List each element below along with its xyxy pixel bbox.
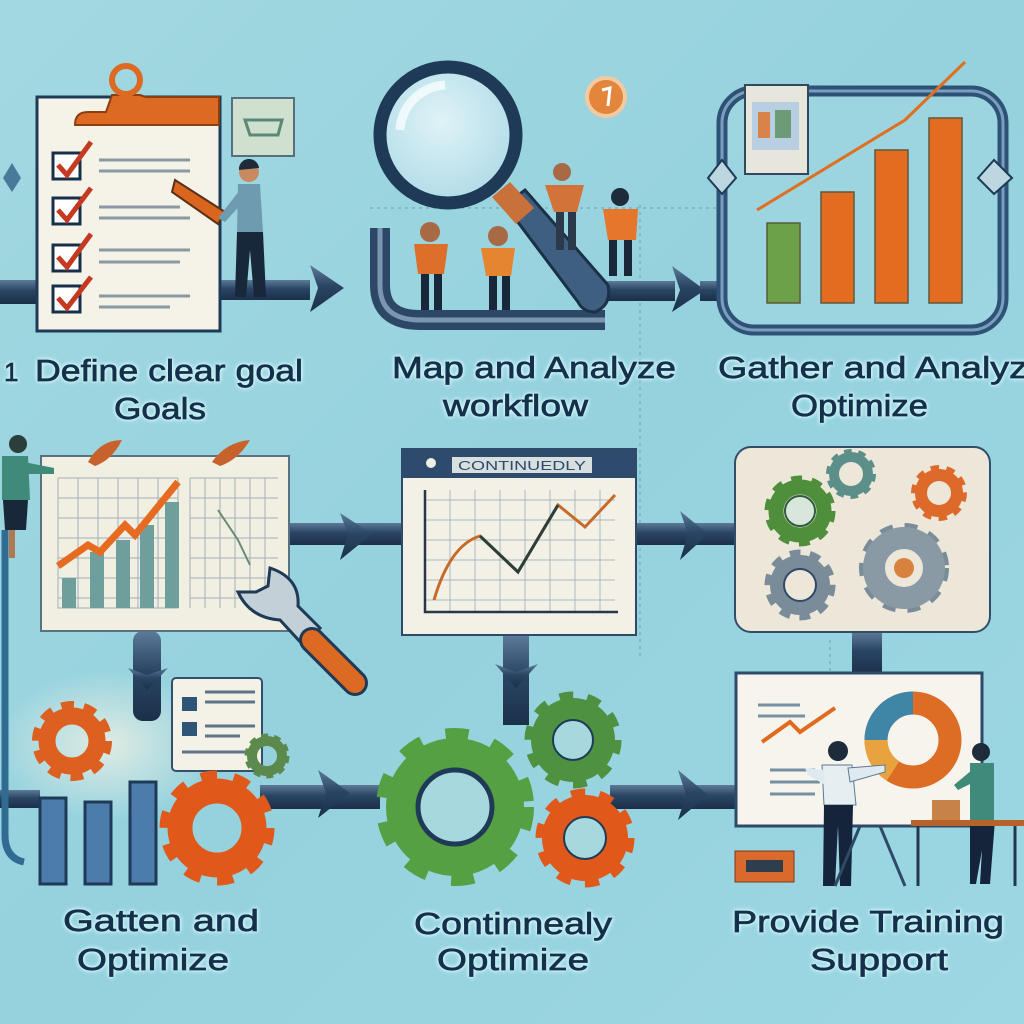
map line xyxy=(218,510,250,565)
heading: step 4 xyxy=(63,903,259,977)
dotted guide lines xyxy=(370,205,830,680)
heading: step 4: Optimize xyxy=(77,942,229,977)
gears xyxy=(770,453,963,615)
panel: central gears xyxy=(385,698,628,881)
grid xyxy=(425,490,615,612)
diamond marker xyxy=(3,163,21,192)
heading: step 2: Map and Analyze xyxy=(392,350,676,385)
clipboard xyxy=(37,66,220,331)
heading: step 5: Continnealy xyxy=(414,906,613,941)
orange gear large xyxy=(167,778,267,878)
panel: gears and documents xyxy=(38,678,286,884)
green gear small xyxy=(248,737,286,775)
title bar xyxy=(402,449,636,478)
connector pipes xyxy=(0,265,882,862)
lines xyxy=(434,495,615,600)
people xyxy=(414,163,638,310)
board xyxy=(735,447,990,632)
sign xyxy=(735,851,794,882)
heading: step 1: 1 xyxy=(4,357,18,387)
heading: step 4: Gatten and xyxy=(63,903,259,938)
heading: step 5 xyxy=(414,906,613,977)
document xyxy=(172,678,262,771)
orange gear small xyxy=(38,707,106,775)
person xyxy=(2,435,54,558)
markers xyxy=(88,440,122,466)
panel: training presentation xyxy=(735,673,1024,886)
heading: step 6: Provide Training xyxy=(732,904,1004,939)
heading: step 6: Support xyxy=(810,942,948,977)
title bar: CONTINUEDLY xyxy=(458,458,586,473)
grid xyxy=(58,478,278,608)
heading: step 3 xyxy=(718,350,1024,423)
window xyxy=(402,449,636,635)
orange badge xyxy=(587,78,625,116)
green gear large xyxy=(385,737,525,877)
table xyxy=(911,800,1024,886)
orange trend xyxy=(58,482,178,566)
u-shaped pipe xyxy=(380,228,605,320)
green gear top xyxy=(531,698,615,782)
frame xyxy=(722,91,1003,330)
panel: define clear goals xyxy=(3,66,294,331)
whiteboard xyxy=(736,673,982,826)
heading: step 1 xyxy=(4,353,303,426)
wrench xyxy=(238,568,355,683)
bars xyxy=(62,502,179,608)
diamonds xyxy=(708,160,736,194)
easel legs xyxy=(835,826,905,886)
panel: map and analyze workflow xyxy=(380,67,638,320)
pale cloud behind gears xyxy=(0,670,215,820)
panel: gears board xyxy=(735,447,990,632)
board xyxy=(41,456,289,631)
heading: step 2: workflow xyxy=(442,388,589,423)
small note card xyxy=(232,98,294,156)
heading: step 1: Goals xyxy=(114,391,206,426)
presenter xyxy=(805,741,885,886)
heading: step 1: Define clear goal xyxy=(35,353,303,388)
panel: bar chart frame xyxy=(708,62,1012,330)
heading: step 3: Gather and Analyz xyxy=(718,350,1024,385)
bars xyxy=(767,118,962,303)
heading: step 5: Optimize xyxy=(437,942,589,977)
report card xyxy=(745,85,808,174)
heading: step 6 xyxy=(732,904,1004,977)
heading: step 3: Optimize xyxy=(791,388,928,423)
panel: line chart window xyxy=(402,449,636,635)
panel: charts board xyxy=(2,435,355,683)
magnifying glass xyxy=(380,67,609,312)
bars xyxy=(40,782,156,884)
text lines xyxy=(758,705,820,794)
person with pencil xyxy=(172,159,266,297)
orange gear bottom xyxy=(542,795,628,881)
trend line xyxy=(757,62,965,210)
checklist xyxy=(53,142,190,312)
heading: step 2 xyxy=(392,350,676,423)
colleague xyxy=(954,743,995,884)
line chart xyxy=(762,708,835,742)
donut chart xyxy=(876,703,950,777)
